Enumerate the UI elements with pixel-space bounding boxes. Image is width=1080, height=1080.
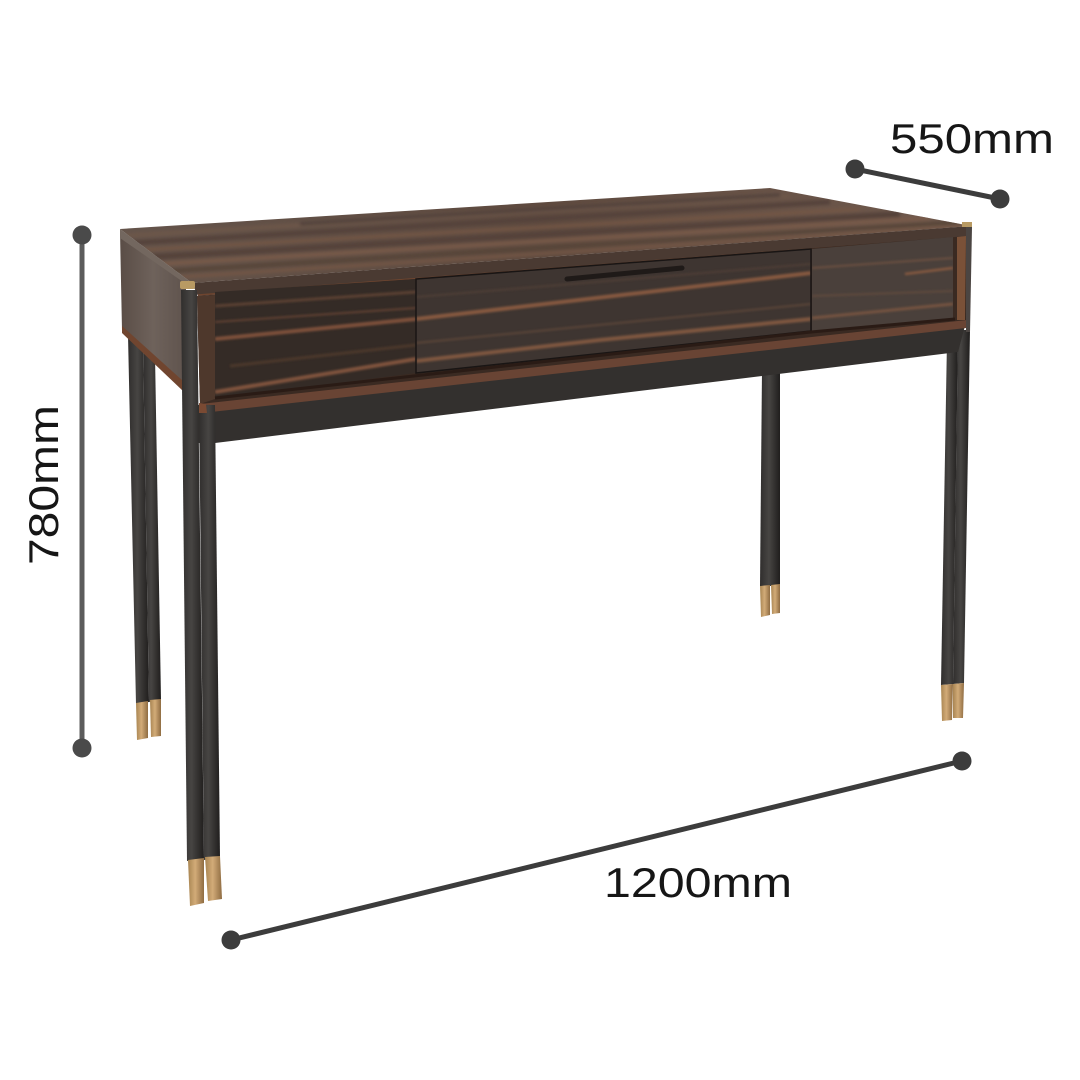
leg pair shafts: [941, 330, 970, 685]
table top: [120, 188, 971, 296]
brass feet: [188, 856, 222, 906]
shelf strip end cap: [199, 403, 207, 413]
leg pair shafts: [128, 335, 161, 704]
left bevel of top: [120, 229, 192, 284]
back right legs: [760, 370, 780, 617]
right drawer panel: [812, 237, 953, 331]
front right corner post: [966, 227, 972, 332]
dimension: width: [222, 752, 972, 950]
metal rail: [198, 322, 966, 443]
label: 1200mm: 1200mm: [604, 859, 792, 906]
brass feet: [941, 683, 964, 721]
brass corner right: [962, 222, 972, 227]
brass feet: [760, 584, 780, 617]
brass corner left: [180, 281, 195, 289]
brass feet: [136, 699, 161, 740]
drawer handle: [567, 268, 682, 279]
width line: [231, 761, 962, 940]
label: 550mm: 550mm: [890, 115, 1054, 162]
drawer seams: [416, 249, 811, 373]
front right legs: [941, 330, 970, 721]
dimension: height: [72, 226, 92, 758]
left drawer panel: [215, 279, 416, 399]
back left legs: [128, 335, 161, 740]
height line: [80, 235, 84, 748]
infographic: desk with dimensions: [29, 124, 1051, 950]
height end dots: [72, 226, 92, 758]
shelf strip: [200, 320, 967, 413]
front left legs: [180, 281, 222, 906]
depth end dots: [846, 160, 1010, 208]
leg pair shafts: [760, 370, 780, 586]
left drawer trim: [197, 295, 215, 404]
leg pair shafts: [181, 290, 220, 861]
right end trim: [957, 236, 966, 320]
wood grain on top: [120, 195, 970, 277]
width end dots: [222, 752, 972, 950]
drawer band: [197, 236, 968, 413]
front edge of top: [192, 226, 971, 296]
left side panel: [120, 232, 186, 392]
depth line: [855, 169, 1000, 199]
dimension: depth: [846, 160, 1010, 208]
centre drawer panel: [416, 249, 811, 373]
label: 780mm: 780mm: [20, 405, 67, 565]
